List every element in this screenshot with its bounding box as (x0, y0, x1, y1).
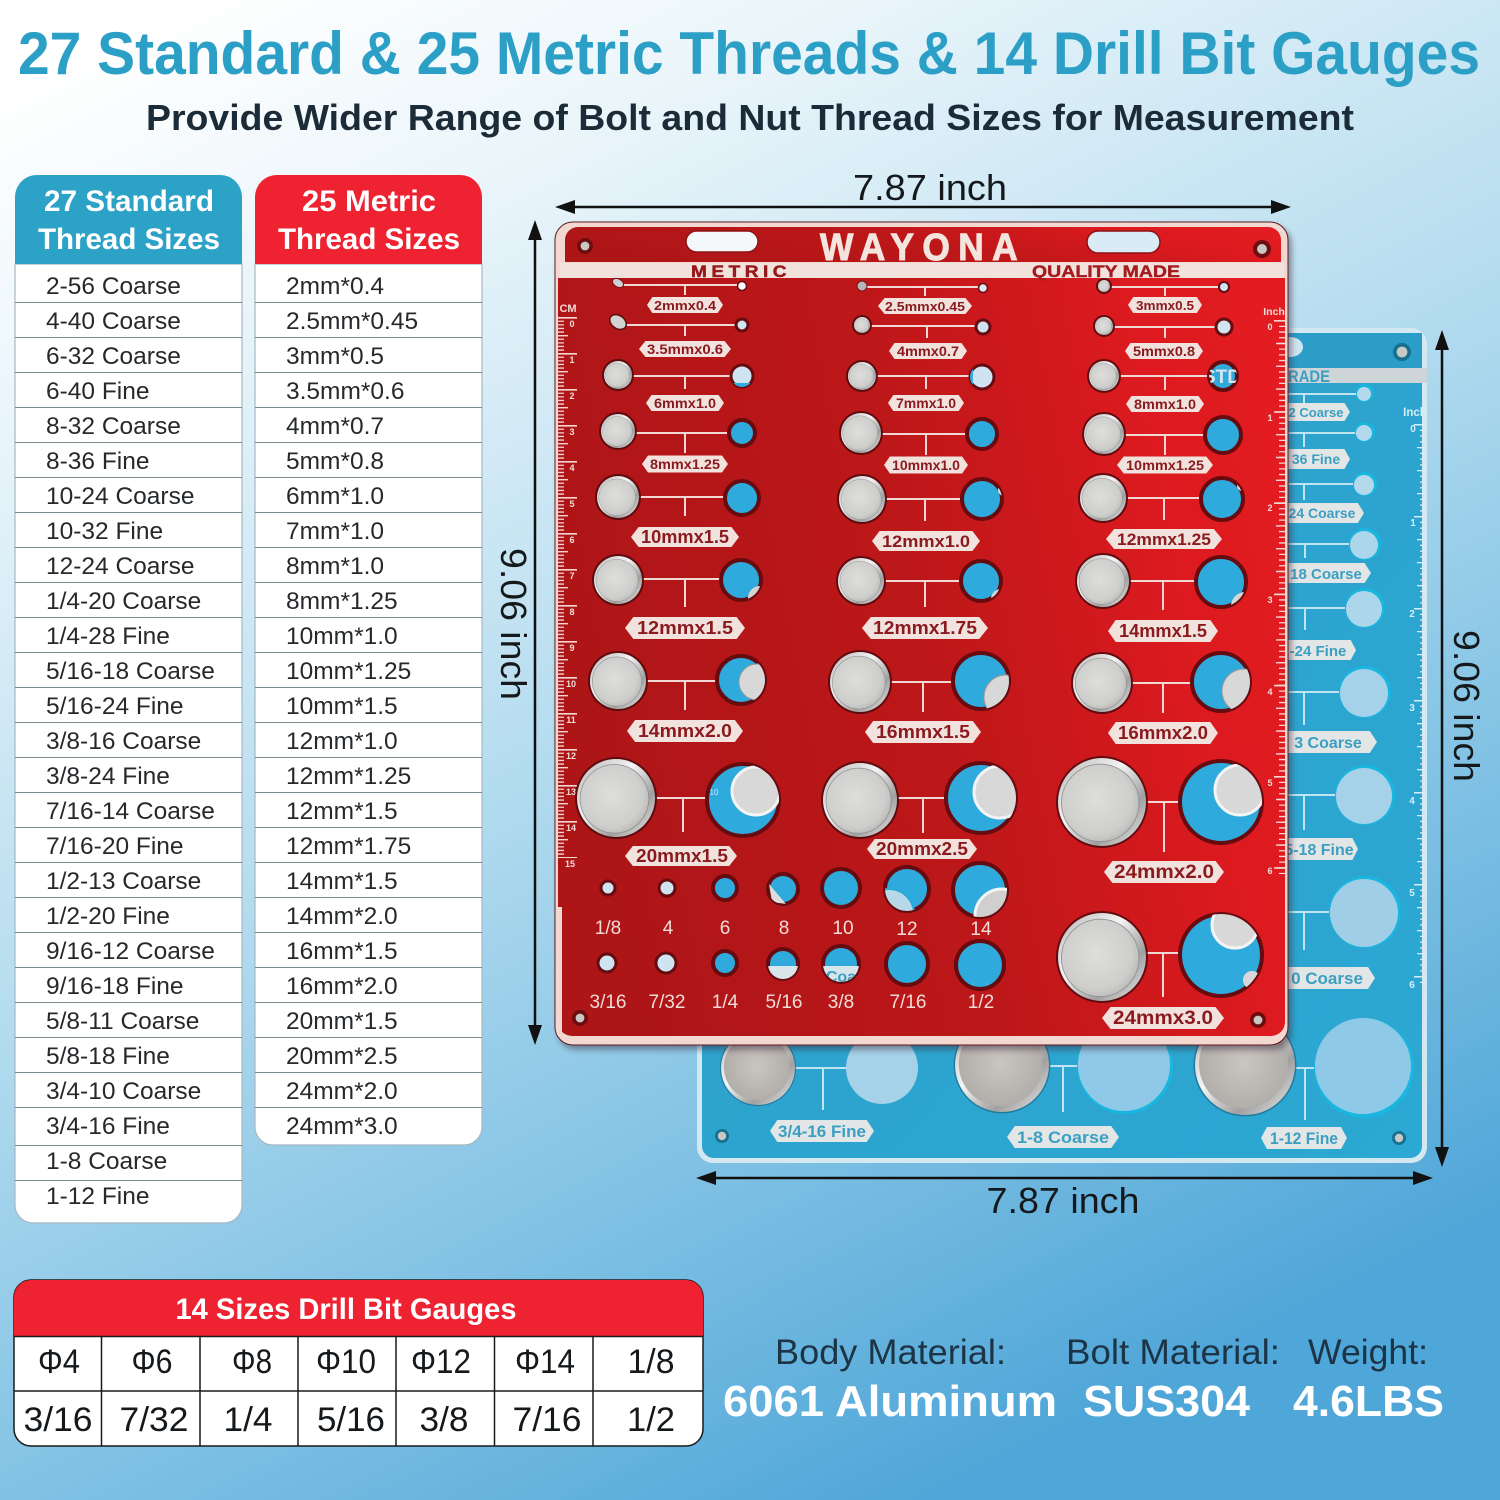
metric table rows: 12mm*1.0 (286, 728, 398, 755)
metric table header (255, 175, 482, 264)
centimetre ruler: 15 (565, 859, 575, 869)
metric table rows: 3.5mm*0.6 (286, 378, 404, 405)
metric table rows: 8mm*1.0 (286, 553, 384, 580)
text: weight: Weight: (1308, 1333, 1428, 1372)
gauge: 5mmx0.8: 5mmx0.8 (1133, 343, 1195, 359)
label: METRIC: METRIC (691, 262, 791, 281)
text: weight (1293, 1333, 1444, 1426)
metric table rows: 10mm*1.0 (286, 623, 398, 650)
panel: metric thread sizes table (255, 175, 482, 1145)
standard table rows: 4-40 Coarse (46, 308, 181, 335)
arrow: bottom width (696, 1171, 1433, 1185)
metric table rows: 20mm*2.5 (286, 1043, 398, 1070)
screws (572, 238, 1271, 1028)
gauge: 20mmx1.5 (577, 759, 780, 866)
inch ruler: 4 (1267, 687, 1273, 697)
drill gauge holes, top row (600, 861, 1009, 919)
standard table rows: 3/8-24 Fine (46, 763, 170, 790)
gauge: 12mmx1.25 (1080, 475, 1247, 549)
arrow: right height (1435, 330, 1449, 1167)
blue plate gauges bottom row (720, 1014, 1414, 1120)
blue plate gauges right side (1287, 384, 1401, 950)
inch ruler: 1 (1267, 413, 1273, 423)
gauge: 8mmx1.0 (1089, 361, 1241, 412)
blue plate labels bottom row (770, 1120, 1347, 1149)
drill gauge holes, bottom row (598, 941, 1004, 989)
gauge: 12mmx1.0: 12mmx1.0 (882, 532, 970, 551)
standard table rows: 1/2-13 Coarse (46, 868, 201, 895)
gauge: 12mmx1.25: 12mmx1.25 (1117, 530, 1211, 549)
blue plate ruler: 2 (1409, 609, 1415, 620)
metric table rows: 16mm*1.5 (286, 938, 398, 965)
drill gauge labels, top row: 10 (832, 918, 854, 939)
drill gauge labels, bottom row: 7/32 (649, 992, 685, 1013)
metric table rows: 10mm*1.25 (286, 658, 411, 685)
centimetre ruler: 1 (569, 355, 575, 365)
standard table rows: 10-24 Coarse (46, 483, 194, 510)
metric table rows (286, 273, 418, 1140)
blue plate labels right side: 24 Coarse (1289, 505, 1356, 521)
standard table rows: 1-8 Coarse (46, 1148, 167, 1175)
gauge: 20mmx1.5: 10 (710, 788, 719, 797)
text: weight: 4.6LBS (1293, 1377, 1444, 1426)
inch ruler: 5 (1267, 778, 1273, 788)
gauge: 10mmx1.5 (597, 476, 759, 547)
drill gauge labels, top row (595, 918, 992, 940)
metric table header: 25 Metric (302, 185, 436, 218)
gauge: 16mmx2.0 (1073, 653, 1266, 744)
metric table rows: 12mm*1.5 (286, 798, 398, 825)
text: bolt material (1066, 1333, 1280, 1426)
drill table values: 3/8 (420, 1401, 468, 1439)
centimetre ruler: 5 (569, 499, 575, 509)
metric table header: Thread Sizes (278, 223, 460, 256)
gauge: 10mmx1.25 (1084, 414, 1241, 474)
text: left height: 9.06 inch (493, 548, 534, 700)
drill table values: 7/16 (512, 1401, 582, 1439)
drill gauge holes, bottom row: Coa (826, 969, 856, 986)
centimetre ruler (559, 303, 577, 869)
panel: standard thread sizes table (15, 175, 242, 1223)
gauge: 3mmx0.5 (1098, 280, 1229, 313)
drill gauge labels, top row: 14 (970, 919, 992, 940)
standard table rows: 7/16-20 Fine (46, 833, 184, 860)
gauge: 16mmx2.0: 16mmx2.0 (1118, 723, 1208, 743)
text: bolt material: Bolt Material: (1066, 1333, 1280, 1372)
centimetre ruler: 9 (569, 643, 575, 653)
gauge: 12mmx1.75: 12mmx1.75 (873, 618, 977, 638)
centimetre ruler: 4 (569, 463, 575, 473)
drill gauge labels, top row: 6 (720, 918, 730, 939)
blue plate ruler: 6 (1409, 980, 1415, 991)
gauge: 2.5mmx0.45 (857, 281, 988, 314)
panel: blue standard gauge plate: RADE (1288, 367, 1330, 386)
text: body material (723, 1333, 1057, 1426)
gauge: 3.5mmx0.6 (607, 312, 748, 357)
drill table values: Φ6 (132, 1343, 172, 1381)
blue plate ruler: 4 (1409, 796, 1415, 807)
text: right height: 9.06 inch (1446, 630, 1487, 782)
metric table rows: 5mm*0.8 (286, 448, 384, 475)
inch ruler: 3 (1267, 595, 1273, 605)
gauge: 10mmx1.5: 10mmx1.5 (641, 527, 729, 547)
gauge: 14mmx2.0: 14mmx2.0 (638, 721, 732, 741)
gauge: 12mmx1.5: 12mmx1.5 (637, 618, 733, 638)
standard table header: Thread Sizes (38, 223, 220, 256)
gauge: 24mmx3.0 (1058, 902, 1262, 1029)
drill gauge labels, bottom row: 3/16 (590, 992, 626, 1013)
text: bottom width: 7.87 inch (986, 1180, 1140, 1221)
metric table rows: 2mm*0.4 (286, 273, 384, 300)
metric table rows: 24mm*2.0 (286, 1078, 398, 1105)
metric table rows: 7mm*1.0 (286, 518, 384, 545)
standard table rows: 1-12 Fine (46, 1183, 150, 1210)
inch ruler: Inch (1263, 306, 1285, 318)
centimetre ruler: 13 (566, 787, 576, 797)
gauge: 2mmx0.4: 2mmx0.4 (654, 298, 717, 313)
brand: WAYONA: WAYONA (820, 227, 1026, 269)
drill table header: 14 Sizes Drill Bit Gauges (176, 1293, 516, 1326)
gauge: 14mmx2.0 (590, 653, 775, 742)
standard table rows: 3/4-16 Fine (46, 1113, 170, 1140)
blue plate labels bottom row: 1-8 Coarse (1017, 1128, 1109, 1147)
gauge: 10mmx1.0: 10mmx1.0 (892, 457, 960, 473)
blue plate ruler (1403, 407, 1427, 991)
metric table rows: 20mm*1.5 (286, 1008, 398, 1035)
blue plate ruler: Inch (1403, 407, 1427, 419)
standard table rows: 5/16-18 Coarse (46, 658, 215, 685)
drill gauge labels, top row: 8 (779, 918, 789, 939)
blue plate labels right side: 36 Fine (1292, 451, 1340, 467)
metric table rows: 14mm*2.0 (286, 903, 398, 930)
drill table values (24, 1343, 675, 1439)
centimetre ruler: 3 (569, 427, 575, 437)
blue plate labels right side: -24 Fine (1290, 643, 1346, 660)
gauge: 20mmx2.5: 20mmx2.5 (876, 839, 968, 859)
inch ruler: 2 (1267, 503, 1273, 513)
drill gauge labels, top row: 4 (663, 918, 674, 939)
red plate shadow (558, 226, 1292, 1050)
text: body material: 6061 Aluminum (723, 1377, 1057, 1426)
standard table header (15, 175, 242, 264)
drill table values: Φ8 (232, 1343, 272, 1381)
standard table rows: 9/16-12 Coarse (46, 938, 215, 965)
blue plate labels right side: 0 Coarse (1291, 969, 1363, 988)
blue plate ruler: 3 (1409, 703, 1415, 714)
gauge: 3.5mmx0.6: 3.5mmx0.6 (647, 341, 723, 357)
standard table rows: 7/16-14 Coarse (46, 798, 215, 825)
gauge: 14mmx1.5 (1077, 555, 1259, 642)
gauge: 14mmx1.5: 14mmx1.5 (1119, 621, 1207, 641)
drill table values: Φ12 (411, 1343, 471, 1381)
text: body material: Body Material: (775, 1333, 1006, 1372)
mounting slots (686, 231, 1160, 253)
gauge: 16mmx1.5: 16mmx1.5 (876, 722, 970, 742)
metric table rows: 6mm*1.0 (286, 483, 384, 510)
gauge: 20mmx1.5: 20mmx1.5 (636, 846, 728, 866)
centimetre ruler: 2 (569, 391, 575, 401)
drill gauge labels, bottom row: 1/2 (968, 992, 994, 1013)
gauge: 6mmx1.0 (604, 361, 754, 411)
standard table rows: 1/4-20 Coarse (46, 588, 201, 615)
blue plate labels bottom row: 1-12 Fine (1270, 1129, 1338, 1148)
gauge: 24mmx3.0: 24mmx3.0 (1113, 1008, 1213, 1029)
inch ruler: 0 (1267, 322, 1273, 332)
gauge: 10mmx1.0 (841, 413, 997, 474)
standard table rows: 3/8-16 Coarse (46, 728, 201, 755)
blue plate labels right side: 18 Coarse (1290, 566, 1362, 583)
inch ruler: 6 (1267, 866, 1273, 876)
centimetre ruler: 11 (566, 715, 576, 725)
drill gauge labels, bottom row (590, 992, 994, 1013)
drill table values: Φ14 (515, 1343, 575, 1381)
drill table values: 1/8 (628, 1343, 674, 1381)
gauge: 7mmx1.0: 7mmx1.0 (896, 395, 956, 411)
gauge: 4mmx0.7 (854, 317, 990, 359)
drill table values: 1/2 (627, 1401, 675, 1439)
drill gauge labels, bottom row: 5/16 (766, 992, 802, 1013)
metric table rows: 10mm*1.5 (286, 693, 398, 720)
metric table rows: 12mm*1.25 (286, 763, 411, 790)
centimetre ruler: CM (559, 303, 577, 315)
standard table rows: 10-32 Fine (46, 518, 163, 545)
standard table rows: 6-40 Fine (46, 378, 150, 405)
centimetre ruler: 0 (569, 319, 575, 329)
drill table values: 1/4 (224, 1401, 272, 1439)
drill table values: Φ4 (38, 1343, 80, 1381)
blue plate labels bottom row: 3/4-16 Fine (778, 1122, 866, 1141)
gauge: 10mmx1.25: 10mmx1.25 (1126, 457, 1204, 473)
standard table rows: 6-32 Coarse (46, 343, 181, 370)
gauge: 8mmx1.25: 8mmx1.25 (650, 456, 720, 472)
panel: red metric gauge plate (555, 222, 1288, 1045)
centimetre ruler: 14 (566, 823, 576, 833)
metric table rows: 24mm*3.0 (286, 1113, 398, 1140)
gauge: 8mmx1.25 (601, 414, 755, 472)
drill gauge labels, bottom row: 1/4 (712, 992, 739, 1013)
centimetre ruler: 6 (569, 535, 575, 545)
centimetre ruler: 7 (569, 571, 575, 581)
standard table rows: 8-36 Fine (46, 448, 150, 475)
subtitle: Provide Wider Range of Bolt and Nut Thread Sizes for Measurement (146, 97, 1354, 138)
blue plate labels right side: 3 Coarse (1294, 735, 1362, 752)
metric table rows: 12mm*1.75 (286, 833, 411, 860)
blue plate ruler: 5 (1409, 888, 1415, 899)
inch ruler (1263, 306, 1285, 876)
metric table rows: 14mm*1.5 (286, 868, 398, 895)
gauge: 12mmx1.75 (838, 558, 1011, 639)
standard table rows: 9/16-18 Fine (46, 973, 184, 1000)
gauge: 24mmx2.0 (1058, 758, 1265, 883)
blue plate labels right side: 5-18 Fine (1284, 842, 1354, 859)
metric table rows: 16mm*2.0 (286, 973, 398, 1000)
text: bolt material: SUS304 (1083, 1377, 1251, 1426)
centimetre ruler: 8 (569, 607, 575, 617)
gauge: 3mmx0.5: 3mmx0.5 (1136, 298, 1194, 313)
metric table rows: 8mm*1.25 (286, 588, 398, 615)
panel: drill bit gauge table (14, 1280, 703, 1446)
blue plate ruler: 1 (1410, 518, 1416, 529)
standard table rows: 1/2-20 Fine (46, 903, 170, 930)
standard table rows: 8-32 Coarse (46, 413, 181, 440)
arrow: top width (555, 200, 1291, 214)
blue plate labels right side: 2 Coarse (1289, 405, 1343, 420)
centimetre ruler: 12 (566, 751, 576, 761)
gauge: 4mmx0.7: 4mmx0.7 (897, 343, 959, 359)
drill table header (14, 1280, 703, 1336)
metric table rows: 2.5mm*0.45 (286, 308, 418, 335)
standard table rows: 2-56 Coarse (46, 273, 181, 300)
standard table rows: 12-24 Coarse (46, 553, 194, 580)
gauge: 12mmx1.0 (839, 476, 1010, 551)
drill gauge labels, top row: 12 (896, 919, 918, 940)
blue plate labels right side (1270, 403, 1377, 989)
gauge: 8mmx1.0: STD (1203, 367, 1241, 388)
centimetre ruler: 10 (566, 679, 576, 689)
standard table rows: 5/16-24 Fine (46, 693, 184, 720)
gauge: 24mmx2.0: 24mmx2.0 (1114, 862, 1214, 883)
standard table rows: 5/8-18 Fine (46, 1043, 170, 1070)
metric table rows: 3mm*0.5 (286, 343, 384, 370)
text: top width: 7.87 inch (853, 167, 1007, 208)
metric table rows: 4mm*0.7 (286, 413, 384, 440)
drill table values: 7/32 (120, 1401, 188, 1439)
gauge: 12mmx1.5 (594, 556, 772, 639)
gauge: 20mmx2.5 (823, 763, 1026, 859)
drill table values: 5/16 (317, 1401, 385, 1439)
standard table rows (46, 273, 215, 1210)
standard table rows: 3/4-10 Coarse (46, 1078, 201, 1105)
drill table values: 3/16 (24, 1401, 92, 1439)
gauge: 2.5mmx0.45: 2.5mmx0.45 (885, 299, 965, 314)
panel: blue standard gauge plate (697, 328, 1427, 1163)
arrow: left height (528, 220, 542, 1045)
label: QUALITY MADE: QUALITY MADE (1032, 262, 1180, 281)
standard table header: 27 Standard (44, 185, 214, 218)
drill gauge labels, top row: 1/8 (595, 918, 621, 939)
drill gauge labels, bottom row: 7/16 (890, 992, 926, 1013)
gauge: 7mmx1.0 (848, 362, 994, 411)
gauge: 16mmx1.5 (830, 652, 1028, 743)
standard table rows: 1/4-28 Fine (46, 623, 170, 650)
drill gauge labels, bottom row: 3/8 (828, 992, 854, 1013)
gauge: 8mmx1.0: 8mmx1.0 (1134, 396, 1196, 412)
standard table rows: 5/8-11 Coarse (46, 1008, 199, 1035)
gauge: 6mmx1.0: 6mmx1.0 (654, 395, 716, 411)
gauge: 5mmx0.8 (1095, 317, 1232, 359)
gauge: 2mmx0.4 (611, 277, 746, 313)
blue plate ruler: 0 (1410, 424, 1416, 435)
drill table values: Φ10 (316, 1343, 376, 1381)
